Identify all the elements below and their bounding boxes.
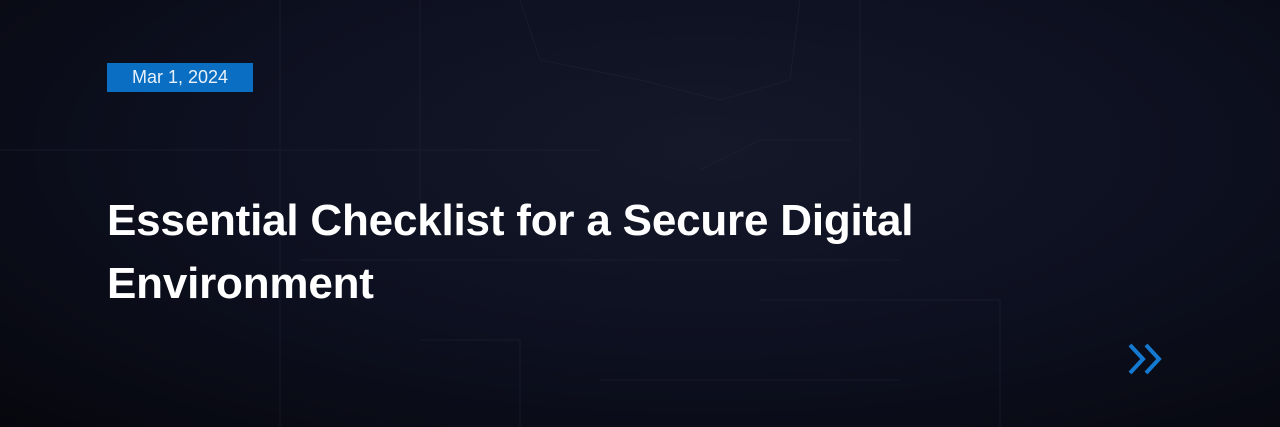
icon: double chevron	[1128, 344, 1162, 374]
title: Environment	[107, 259, 374, 308]
date tag	[107, 63, 253, 92]
title	[107, 196, 913, 308]
title: Essential Checklist for a Secure Digital	[107, 196, 913, 245]
date tag: Mar 1, 2024	[132, 67, 228, 87]
